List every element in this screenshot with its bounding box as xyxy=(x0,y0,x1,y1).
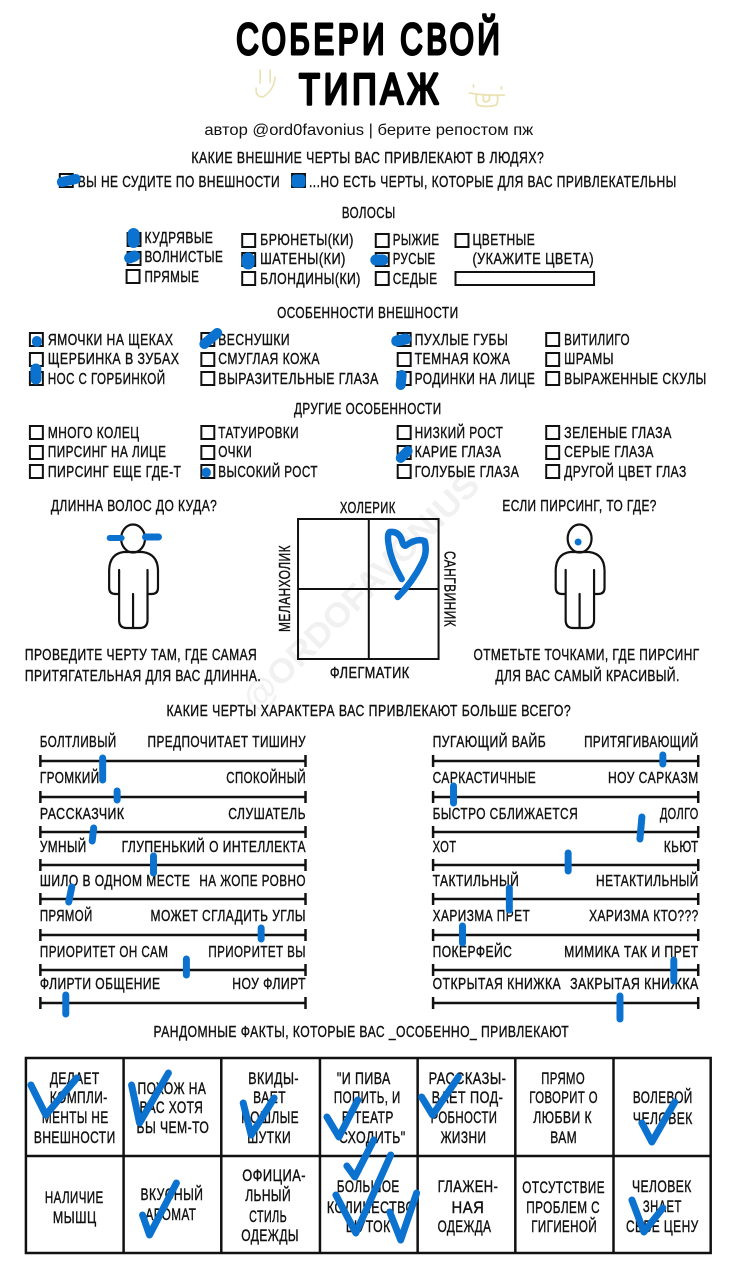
table cell text: ПРОБЛЕМ С xyxy=(526,1199,600,1217)
table cell text: ВАС ХОТЯ xyxy=(140,1099,203,1117)
panel: hair checklist: (УКАЖИТЕ ЦВЕТА) xyxy=(472,251,594,268)
table cell text: ВКИДЫ- xyxy=(248,1070,299,1088)
panel: appearance checklist: ВИТИЛИГО xyxy=(564,332,630,349)
panel: right trait sliders: КЬЮТ xyxy=(664,839,699,856)
table cell text: ЧЕЛОВЕК xyxy=(633,1110,693,1128)
panel: left trait sliders: СПОКОЙНЫЙ xyxy=(226,768,306,787)
mark: heart xyxy=(388,532,426,597)
slider lines xyxy=(40,755,306,1009)
panel: temperament quadrant: ХОЛЕРИК xyxy=(340,500,396,517)
panel: other features checklist: ПИРСИНГ ЕЩЕ ГДЕ-Т xyxy=(48,464,181,481)
panel: other features checklist: ОЧКИ xyxy=(218,444,252,461)
panel: right trait sliders: ТАКТИЛЬНЫЙ xyxy=(433,871,519,890)
panel: appearance checklist: НОС С ГОРБИНКОЙ xyxy=(48,369,165,388)
panel: left trait sliders: МОЖЕТ СГЛАДИТЬ УГЛЫ xyxy=(151,908,306,925)
panel: random facts table xyxy=(26,1058,711,1253)
panel: hair checklist: ВОЛНИСТЫЕ xyxy=(145,249,223,266)
panel: appearance checklist: ВЕСНУШКИ xyxy=(218,332,290,349)
icon: left doodle smile xyxy=(256,70,275,97)
panel: left trait sliders: БОЛТЛИВЫЙ xyxy=(40,732,117,751)
table cell text: ВОЛЕВОЙ xyxy=(633,1088,693,1107)
panel: right trait sliders: ХАРИЗМА ПРЕТ xyxy=(433,908,530,925)
panel: right trait sliders: ХАРИЗМА КТО??? xyxy=(589,908,699,925)
heading: appearance features: ОСОБЕННОСТИ ВНЕШНОСТИ xyxy=(277,305,459,322)
table cell text: СХОДИТЬ" xyxy=(339,1129,406,1147)
table cell text: БОЛЬШОЕ xyxy=(337,1178,400,1196)
marks: hair scribbles xyxy=(130,234,383,263)
table cell text: ВНЕШНОСТИ xyxy=(34,1129,116,1147)
marks: blue check marks xyxy=(31,1073,675,1240)
panel: temperament quadrant: ФЛЕГМАТИК xyxy=(330,665,410,682)
panel: appearance checklist: ЯМОЧКИ НА ЩЕКАХ xyxy=(48,332,173,349)
panel: appearance checklist: СМУГЛАЯ КОЖА xyxy=(218,351,320,368)
panel: hair checklist: БЛОНДИНЫ(КИ) xyxy=(260,271,361,288)
table cell text: ГЛАЖЕН- xyxy=(438,1178,498,1196)
table cell text: ШУТКИ xyxy=(247,1129,291,1147)
heading: character traits: КАКИЕ ЧЕРТЫ ХАРАКТЕРА ВАС ПРИВЛЕКАЮТ БОЛЬШЕ ВСЕГО? xyxy=(166,703,571,720)
panel: left trait sliders: ФЛИРТИ ОБЩЕНИЕ xyxy=(40,976,160,993)
panel: other features checklist: ГОЛУБЫЕ ГЛАЗА xyxy=(415,464,519,481)
panel: right trait sliders: ОТКРЫТАЯ КНИЖКА xyxy=(433,976,561,993)
table grid xyxy=(26,1058,711,1253)
panel: hair checklist xyxy=(127,230,594,288)
panel: hair checklist: ШАТЕНЫ(КИ) xyxy=(260,251,346,268)
table cell text: ЧЕЛОВЕК xyxy=(632,1178,692,1196)
slider lines xyxy=(433,755,698,1009)
panel: appearance checklist: ВЫРАЗИТЕЛЬНЫЕ ГЛАЗА xyxy=(218,371,379,388)
panel: appearance checklist: РОДИНКИ НА ЛИЦЕ xyxy=(415,371,535,388)
panel: hair length figure: ДЛИННА ВОЛОС ДО КУДА? xyxy=(51,498,217,515)
table cell text: СЕБЕ ЦЕНУ xyxy=(626,1218,699,1236)
table cell text: РАССКАЗЫ- xyxy=(429,1070,506,1088)
icon: right doodle tongue face xyxy=(469,85,504,106)
table cell text: ОТСУТСТВИЕ xyxy=(522,1179,605,1197)
panel: piercing figure xyxy=(473,498,700,685)
panel: left trait sliders: РАССКАЗЧИК xyxy=(40,806,125,823)
table cell text: ЛЮБВИ К xyxy=(533,1109,592,1127)
panel: hair checklist: СЕДЫЕ xyxy=(393,271,438,288)
panel: other features checklist xyxy=(30,423,687,481)
marks: left slider ticks xyxy=(66,758,261,1014)
panel: left trait sliders: СЛУШАТЕЛЬ xyxy=(228,806,306,823)
table cell text: БЫ ЧЕМ-ТО xyxy=(137,1119,209,1137)
grid xyxy=(298,519,439,659)
panel: appearance checklist: ПУХЛЫЕ ГУБЫ xyxy=(415,332,508,349)
panel: other features checklist: ВЫСОКИЙ РОСТ xyxy=(218,462,318,481)
table cell text: ОДЕЖДА xyxy=(438,1218,491,1236)
panel: right trait sliders xyxy=(433,732,699,1019)
panel: right trait sliders: НОУ САРКАЗМ xyxy=(608,770,699,787)
heading: appearance question: КАКИЕ ВНЕШНИЕ ЧЕРТЫ ВАС ПРИВЛЕКАЮТ В ЛЮДЯХ? xyxy=(191,150,544,167)
panel: left trait sliders: ПРИОРИТЕТ ВЫ xyxy=(208,944,306,961)
panel: temperament quadrant xyxy=(277,500,458,682)
panel: left trait sliders: НОУ ФЛИРТ xyxy=(232,976,306,993)
panel: right trait sliders: НЕТАКТИЛЬНЫЙ xyxy=(596,871,699,890)
heading: random facts: РАНДОМНЫЕ ФАКТЫ, КОТОРЫЕ ВАС _ОСОБЕННО_ ПРИВЛЕКАЮТ xyxy=(153,1024,569,1041)
table cell text: АРОМАТ xyxy=(146,1206,196,1224)
icon: person right xyxy=(556,524,605,628)
title: СОБЕРИ СВОЙ xyxy=(236,13,503,64)
icon: person left xyxy=(109,524,158,628)
table cell text: МЫШЦ xyxy=(53,1209,97,1227)
panel: other features checklist: ПИРСИНГ НА ЛИЦЕ xyxy=(48,444,166,461)
panel: left trait sliders: ПРЯМОЙ xyxy=(40,906,93,925)
panel: right trait sliders: ПУГАЮЩИЙ ВАЙБ xyxy=(433,732,546,751)
option: do not judge: ВЫ НЕ СУДИТЕ ПО ВНЕШНОСТИ xyxy=(78,174,280,191)
watermark: @ORDOFAVONIUS xyxy=(235,466,487,719)
panel: appearance checklist xyxy=(30,332,707,388)
panel: temperament quadrant: МЕЛАНХОЛИК xyxy=(277,545,294,632)
panel: hair length figure xyxy=(25,498,261,685)
table cell text: ОДЕЖДЫ xyxy=(241,1227,299,1245)
table cell text: СТИЛЬ xyxy=(249,1208,287,1226)
marks: other features scribbles xyxy=(206,451,408,473)
panel: hair length figure: ПРИТЯГАТЕЛЬНАЯ ДЛЯ ВАС ДЛИННА. xyxy=(25,668,261,685)
table cell text: ШУТОК xyxy=(346,1218,391,1236)
author line: автор @ord0favonius | берите репостом пж xyxy=(204,122,534,139)
title: ТИПАЖ xyxy=(299,65,443,114)
table cell text: ЖИЗНИ xyxy=(441,1129,486,1147)
panel: other features checklist: ДРУГОЙ ЦВЕТ ГЛАЗ xyxy=(564,462,687,481)
heading: hair: ВОЛОСЫ xyxy=(342,205,396,222)
panel: other features checklist: МНОГО КОЛЕЦ xyxy=(48,425,140,442)
panel: temperament quadrant: САНГВИНИК xyxy=(441,551,458,627)
title xyxy=(236,13,503,114)
table cell text: НАЛИЧИЕ xyxy=(45,1189,104,1207)
panel: right trait sliders: ДОЛГО xyxy=(660,806,699,823)
table cell text: ВАЕТ xyxy=(253,1089,286,1107)
table cell text: ПРЯМО xyxy=(541,1070,585,1088)
table cell text: ПОПИТЬ, И xyxy=(334,1089,401,1107)
table cell text: РОБНОСТИ xyxy=(431,1109,497,1127)
table cell text: ВКУСНЫЙ xyxy=(141,1185,203,1204)
panel: hair checklist: ПРЯМЫЕ xyxy=(145,269,199,286)
table cell text: В ТЕАТР xyxy=(342,1109,394,1127)
table cell text: "И ПИВА xyxy=(337,1070,391,1088)
marks: right slider ticks xyxy=(454,755,674,1019)
panel: right trait sliders: ХОТ xyxy=(433,839,457,856)
table cell text: ЗНАЕТ xyxy=(643,1198,682,1216)
panel: left trait sliders: ШИЛО В ОДНОМ МЕСТЕ xyxy=(40,873,190,890)
panel: hair checklist: РУСЫЕ xyxy=(393,251,436,268)
table cell text: ГИГИЕНОЙ xyxy=(531,1217,597,1236)
panel: right trait sliders: ПОКЕРФЕЙС xyxy=(433,942,512,961)
panel: right trait sliders: ЗАКРЫТАЯ КНИЖКА xyxy=(570,976,699,993)
panel: hair checklist: РЫЖИЕ xyxy=(393,232,440,249)
table cell text: ЛЬНЫЙ xyxy=(245,1186,291,1205)
table cell text: ПОШЛЫЕ xyxy=(241,1109,299,1127)
table cell text: КОМПЛИ- xyxy=(50,1089,108,1107)
panel: other features checklist: ТАТУИРОВКИ xyxy=(218,425,299,442)
panel: left trait sliders: ПРЕДПОЧИТАЕТ ТИШИНУ xyxy=(148,734,306,751)
marks: hair length lines xyxy=(110,537,158,538)
panel: appearance checklist: ТЕМНАЯ КОЖА xyxy=(415,351,510,368)
panel: hair checklist: ЦВЕТНЫЕ xyxy=(472,232,535,249)
panel: hair checklist: БРЮНЕТЫ(КИ) xyxy=(260,232,354,249)
table cell text xyxy=(34,1070,699,1245)
panel: left trait sliders: НА ЖОПЕ РОВНО xyxy=(199,873,306,890)
panel: left trait sliders xyxy=(40,732,306,1014)
panel: left trait sliders: ГРОМКИЙ xyxy=(40,768,100,787)
panel: appearance checklist: ШРАМЫ xyxy=(564,351,614,368)
panel: left trait sliders: ГЛУПЕНЬКИЙ О ИНТЕЛЛЕКТА xyxy=(122,837,306,856)
table cell text: ГОВОРИТ О xyxy=(529,1089,598,1107)
marks: option scribbles xyxy=(62,178,302,184)
panel: left trait sliders: УМНЫЙ xyxy=(40,837,87,856)
panel: right trait sliders: МИМИКА ТАК И ПРЕТ xyxy=(564,944,699,961)
table cell text: МЕНТЫ НЕ xyxy=(42,1109,109,1127)
marks: appearance scribbles xyxy=(36,333,406,385)
mark: piercing dot xyxy=(575,538,582,546)
panel: right trait sliders: БЫСТРО СБЛИЖАЕТСЯ xyxy=(433,806,578,823)
table cell text: ДЕЛАЕТ xyxy=(50,1070,100,1088)
panel: piercing figure: ДЛЯ ВАС САМЫЙ КРАСИВЫЙ. xyxy=(495,666,680,685)
heading: other features: ДРУГИЕ ОСОБЕННОСТИ xyxy=(294,401,442,418)
panel: other features checklist: ЗЕЛЕНЫЕ ГЛАЗА xyxy=(564,425,672,442)
table cell text: ОФИЦИА- xyxy=(242,1167,306,1185)
panel: other features checklist: СЕРЫЕ ГЛАЗА xyxy=(564,444,654,461)
panel: piercing figure: ЕСЛИ ПИРСИНГ, ТО ГДЕ? xyxy=(502,498,657,515)
panel: hair length figure: ПРОВЕДИТЕ ЧЕРТУ ТАМ, ГДЕ САМАЯ xyxy=(25,647,257,664)
panel: judge by looks options xyxy=(60,174,677,191)
table cell text: ВАЕТ ПОД- xyxy=(432,1089,503,1107)
panel: appearance checklist: ЩЕРБИНКА В ЗУБАХ xyxy=(48,351,179,368)
panel: left trait sliders: ПРИОРИТЕТ ОН САМ xyxy=(40,944,168,961)
panel: hair checklist: КУДРЯВЫЕ xyxy=(145,230,213,247)
panel: right trait sliders: САРКАСТИЧНЫЕ xyxy=(433,770,536,787)
table cell text: ПОХОЖ НА xyxy=(138,1080,206,1098)
table cell text: НАЯ xyxy=(452,1199,484,1217)
table cell text: ВАМ xyxy=(550,1129,577,1147)
panel: other features checklist: КАРИЕ ГЛАЗА xyxy=(415,444,501,461)
panel: other features checklist: НИЗКИЙ РОСТ xyxy=(415,423,503,442)
table cell text: КОЛИЧЕСТВО xyxy=(327,1199,416,1217)
